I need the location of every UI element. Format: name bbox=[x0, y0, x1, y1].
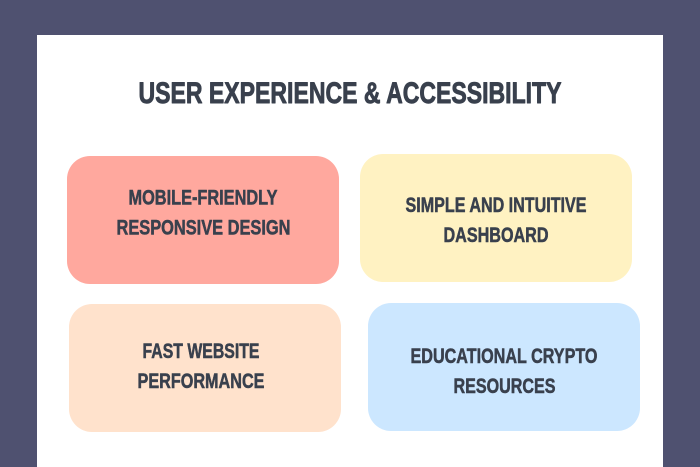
title: USER EXPERIENCE & ACCESSIBILITY bbox=[138, 77, 562, 110]
panel: simple and intuitive dashboard: DASHBOARD bbox=[444, 223, 548, 247]
panel: educational crypto resources: RESOURCES bbox=[454, 374, 556, 398]
panel: mobile-friendly responsive design: MOBILE-FRIENDLY bbox=[128, 186, 278, 210]
panel: simple and intuitive dashboard bbox=[360, 154, 632, 282]
panel: fast website performance: PERFORMANCE bbox=[138, 369, 264, 393]
panel: fast website performance: FAST WEBSITE bbox=[142, 339, 260, 363]
panel: simple and intuitive dashboard: SIMPLE AND INTUITIVE bbox=[406, 193, 586, 217]
panel: educational crypto resources: EDUCATIONAL CRYPTO bbox=[410, 344, 598, 368]
panel: mobile-friendly responsive design: RESPONSIVE DESIGN bbox=[116, 216, 290, 240]
panel: mobile-friendly responsive design bbox=[67, 156, 339, 284]
panel: educational crypto resources bbox=[368, 303, 640, 431]
panel: fast website performance bbox=[69, 304, 341, 432]
